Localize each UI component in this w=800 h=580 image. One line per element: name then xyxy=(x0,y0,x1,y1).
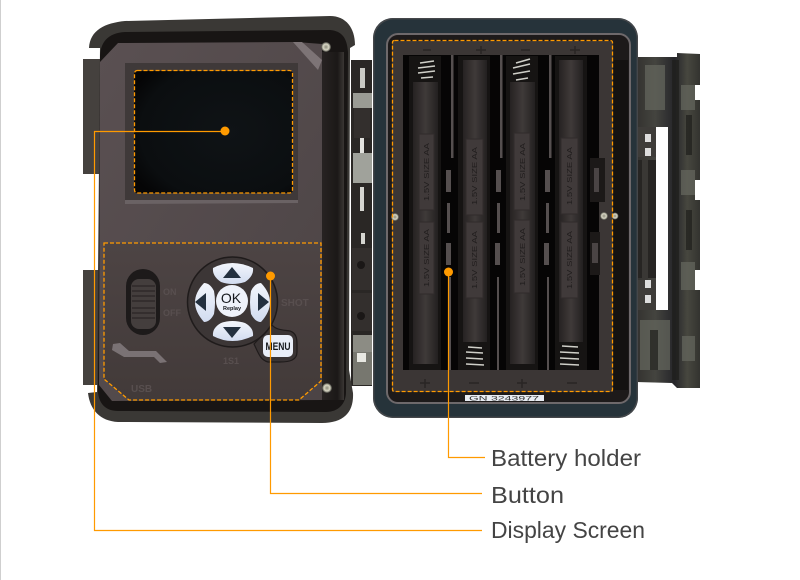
button dial xyxy=(188,257,297,362)
OK button: OK xyxy=(221,290,242,306)
battery compartment door (right panel) xyxy=(373,18,638,418)
bevel corner xyxy=(293,42,322,70)
battery well xyxy=(403,55,599,370)
battery cell 4: 1.5V SIZE AA xyxy=(565,231,574,289)
down button xyxy=(213,321,253,341)
button panel xyxy=(104,243,321,400)
callout: Display Screen: Display Screen xyxy=(491,517,645,543)
OK button: Replay xyxy=(223,306,242,312)
switch labels: OFF xyxy=(163,308,181,318)
camera front cover (left panel) xyxy=(83,16,372,423)
callout: Battery holder xyxy=(444,268,641,471)
hinge strip xyxy=(351,60,372,386)
serial number label: GN 3243977 xyxy=(469,396,540,402)
OK button xyxy=(216,285,248,317)
left latch flaps xyxy=(83,59,103,385)
usb cover mark xyxy=(112,343,167,363)
switch labels: ON xyxy=(163,287,176,297)
battery cell 3: 1.5V SIZE AA xyxy=(518,143,527,201)
battery cell 3 xyxy=(506,56,538,370)
up button xyxy=(213,263,253,284)
right button xyxy=(250,283,270,322)
control plate xyxy=(99,42,322,401)
left button xyxy=(195,283,215,322)
battery cell 3: 1.5V SIZE AA xyxy=(518,228,527,286)
page edge line xyxy=(0,0,1,580)
serial number label xyxy=(465,395,544,402)
menu button: MENU xyxy=(266,341,291,353)
callout: Button: Button xyxy=(491,482,564,508)
callout: Battery holder: Battery holder xyxy=(491,445,641,471)
display screen xyxy=(134,71,293,193)
outer casing xyxy=(88,16,355,423)
power switch xyxy=(126,269,160,335)
dashed outline: display screen xyxy=(134,70,292,193)
battery cell 2: 1.5V SIZE AA xyxy=(470,147,479,205)
polarity marks xyxy=(420,46,580,388)
battery cell 4: 1.5V SIZE AA xyxy=(565,147,574,205)
switch labels: USB xyxy=(131,384,152,395)
switch labels: 1S1 xyxy=(223,356,239,366)
switch labels xyxy=(131,287,309,395)
battery cell 1: 1.5V SIZE AA xyxy=(422,229,431,287)
switch labels: SHOT xyxy=(281,298,309,309)
callout: Button xyxy=(266,272,564,508)
screen recess xyxy=(125,63,298,202)
battery cell 2 xyxy=(458,56,490,370)
compartment screws xyxy=(391,212,618,221)
dividers xyxy=(446,55,552,370)
screws xyxy=(321,42,332,393)
hinged side flap (right) xyxy=(636,53,700,388)
battery cell 1 xyxy=(409,56,441,370)
dashed outline: battery holder xyxy=(392,40,612,392)
right plate shadow xyxy=(322,52,344,400)
battery cell 1: 1.5V SIZE AA xyxy=(422,143,431,201)
battery cell 2: 1.5V SIZE AA xyxy=(470,231,479,289)
callout: Display Screen xyxy=(94,126,645,543)
dashed outline: button area xyxy=(104,243,321,400)
right clip column xyxy=(590,158,605,202)
battery cell 4 xyxy=(555,56,587,370)
